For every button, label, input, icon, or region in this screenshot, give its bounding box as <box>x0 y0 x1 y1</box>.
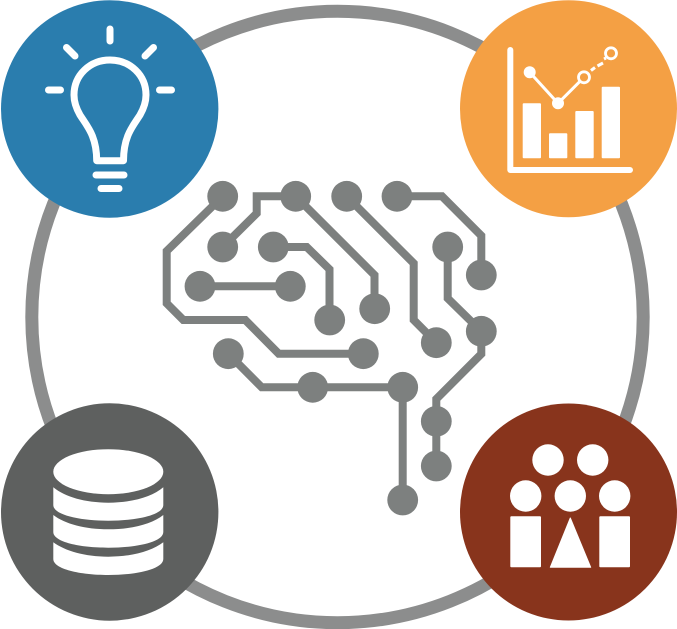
icon: light bulb <box>48 29 172 188</box>
chart axes <box>510 50 630 170</box>
circuit traces <box>167 196 481 500</box>
panel: people (red-brown) <box>460 404 677 620</box>
circuit nodes <box>185 181 497 515</box>
icon: group of people <box>510 444 630 567</box>
chart bars <box>523 87 620 158</box>
icon: bar and line chart <box>510 48 630 170</box>
panel: idea (blue) <box>1 0 218 218</box>
orange circle <box>460 0 677 217</box>
circuit brain <box>167 181 497 515</box>
blue circle <box>1 0 218 218</box>
panel: data (dark grey) <box>1 403 218 621</box>
panel: analytics (orange) <box>460 0 677 217</box>
red-brown circle <box>460 404 677 620</box>
dark grey circle <box>1 403 218 621</box>
icon: database stack <box>53 449 163 575</box>
trend line <box>524 48 616 109</box>
